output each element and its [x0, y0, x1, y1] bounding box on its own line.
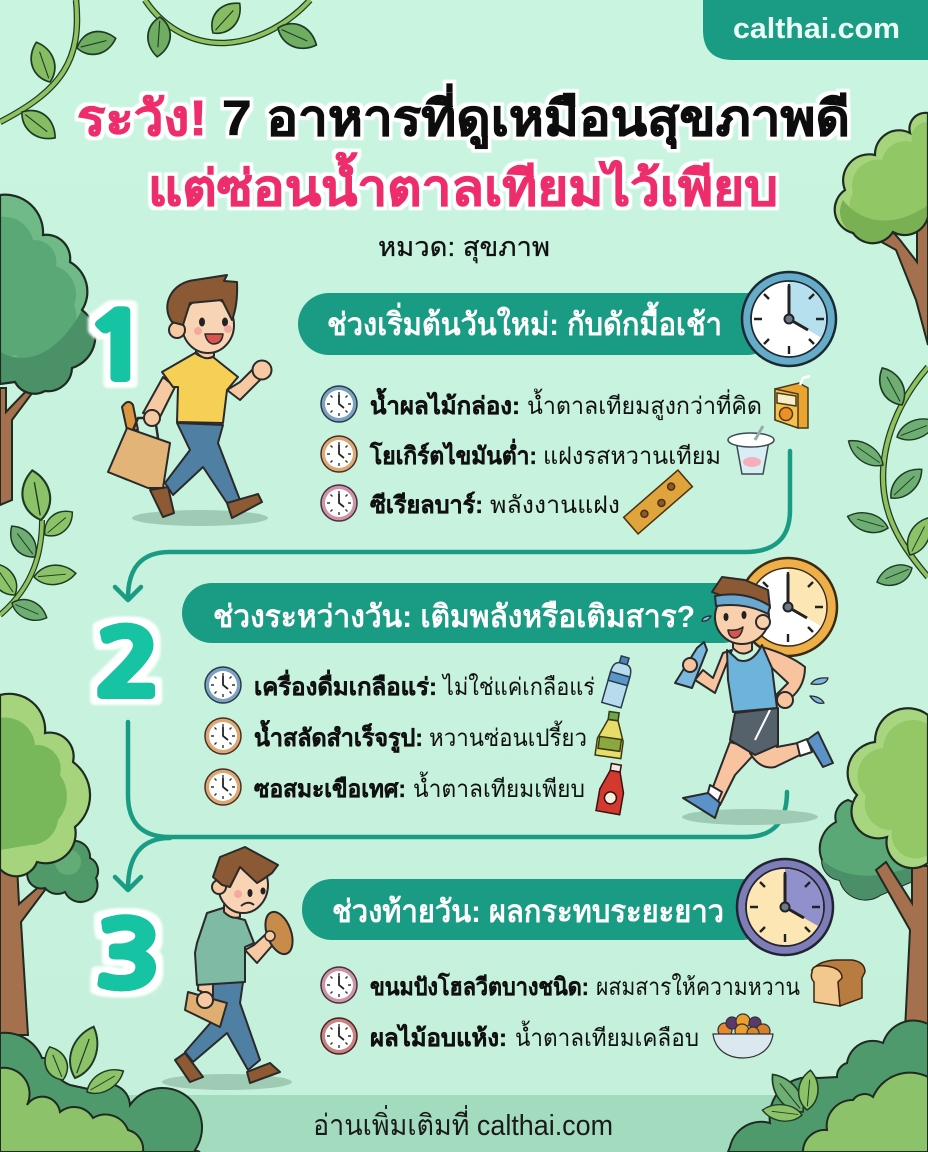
panel: step 1 morning: [298, 272, 836, 534]
title: [77, 83, 850, 216]
item: cereal bar: [321, 470, 692, 534]
heading pill: evening: [302, 879, 772, 940]
vine: top centre: [145, 0, 321, 58]
icon: morning clock: [742, 272, 836, 366]
flow connectors: [115, 451, 790, 890]
item: wholewheat bread: ขนมปังโฮลวีตบางชนิด:: [370, 972, 589, 1001]
item: wholewheat bread: [321, 960, 865, 1006]
tree: upper left: [0, 195, 95, 505]
site tab: [703, 0, 928, 60]
item: low-fat yogurt: แฝงรสหวานเทียม: [543, 443, 721, 470]
tree: upper right: [835, 113, 928, 345]
character: walking man with bag: [108, 275, 272, 526]
item: sports drink: ไม่ใช่แค่เกลือแร่: [441, 673, 595, 701]
step number 3: 3: [95, 911, 161, 1001]
vine: top left: [0, 0, 118, 146]
footer band: [0, 1095, 928, 1152]
item: low-fat yogurt: [321, 426, 774, 474]
item: boxed juice: [321, 376, 810, 428]
tree: lower right: [820, 708, 928, 1030]
panel: step 2 midday: [182, 558, 837, 825]
heading pill: morning: ช่วงเริ่มต้นวันใหม่: กับดักมื้อเช้า: [327, 301, 722, 342]
icon: evening clock: [737, 859, 833, 955]
heading pill: evening: ช่วงท้ายวัน: ผลกระทบระยะยาว: [332, 894, 724, 929]
heading pill: midday: ช่วงระหว่างวัน: เติมพลังหรือเติมสาร?: [213, 599, 695, 634]
title: ระวัง!: [77, 92, 207, 146]
item: salad dressing: [205, 710, 627, 759]
item: ketchup: [205, 762, 628, 815]
item: boxed juice: น้ำตาลเทียมสูงกว่าที่คิด: [527, 388, 762, 421]
title: 7 อาหารที่ดูเหมือนสุขภาพดี: [222, 83, 850, 149]
item: cereal bar: พลังงานแฝง: [490, 492, 620, 519]
tree: lower left: [0, 694, 98, 1035]
item: low-fat yogurt: โยเกิร์ตไขมันต่ำ:: [369, 438, 537, 470]
vine: left middle: [0, 468, 78, 626]
item: boxed juice: น้ำผลไม้กล่อง:: [370, 387, 520, 420]
item: sports drink: เครื่องดื่มเกลือแร่:: [254, 669, 437, 701]
item: salad dressing: น้ำสลัดสำเร็จรูป:: [254, 719, 423, 753]
heading pill: morning: [298, 293, 778, 355]
item: ketchup: น้ำตาลเทียมเพียบ: [413, 771, 585, 803]
heading pill: midday: [182, 583, 752, 643]
item: ketchup: ซอสมะเขือเทศ:: [254, 776, 406, 803]
item: cereal bar: ซีเรียลบาร์:: [370, 491, 483, 519]
bush: bottom right: [728, 1021, 928, 1152]
footer text: อ่านเพิ่มเติมที่ calthai.com: [313, 1105, 613, 1142]
bush: bottom left: [0, 1022, 202, 1152]
icon: midday clock: [739, 558, 837, 656]
category label: หมวด: สุขภาพ: [378, 232, 550, 264]
item: dried fruit: น้ำตาลเทียมเคลือบ: [515, 1020, 699, 1052]
step number 2: 2: [95, 619, 161, 709]
item: sports drink: [205, 654, 635, 708]
character: tired man with bread: [162, 847, 298, 1090]
step number 1: 1: [85, 302, 151, 392]
item: wholewheat bread: ผสมสารให้ความหวาน: [596, 973, 800, 1001]
item: dried fruit: ผลไม้อบแห้ง:: [370, 1023, 507, 1052]
vine: right middle: [843, 363, 928, 591]
site tab: calthai.com: [733, 13, 900, 45]
title: แต่ซ่อนน้ำตาลเทียมไว้เพียบ: [148, 152, 778, 216]
panel: step 3 evening: [302, 859, 865, 1058]
item: salad dressing: หวานซ่อนเปรี้ยว: [429, 720, 587, 752]
item: dried fruit: [321, 1014, 773, 1058]
character: runner: [675, 577, 833, 825]
